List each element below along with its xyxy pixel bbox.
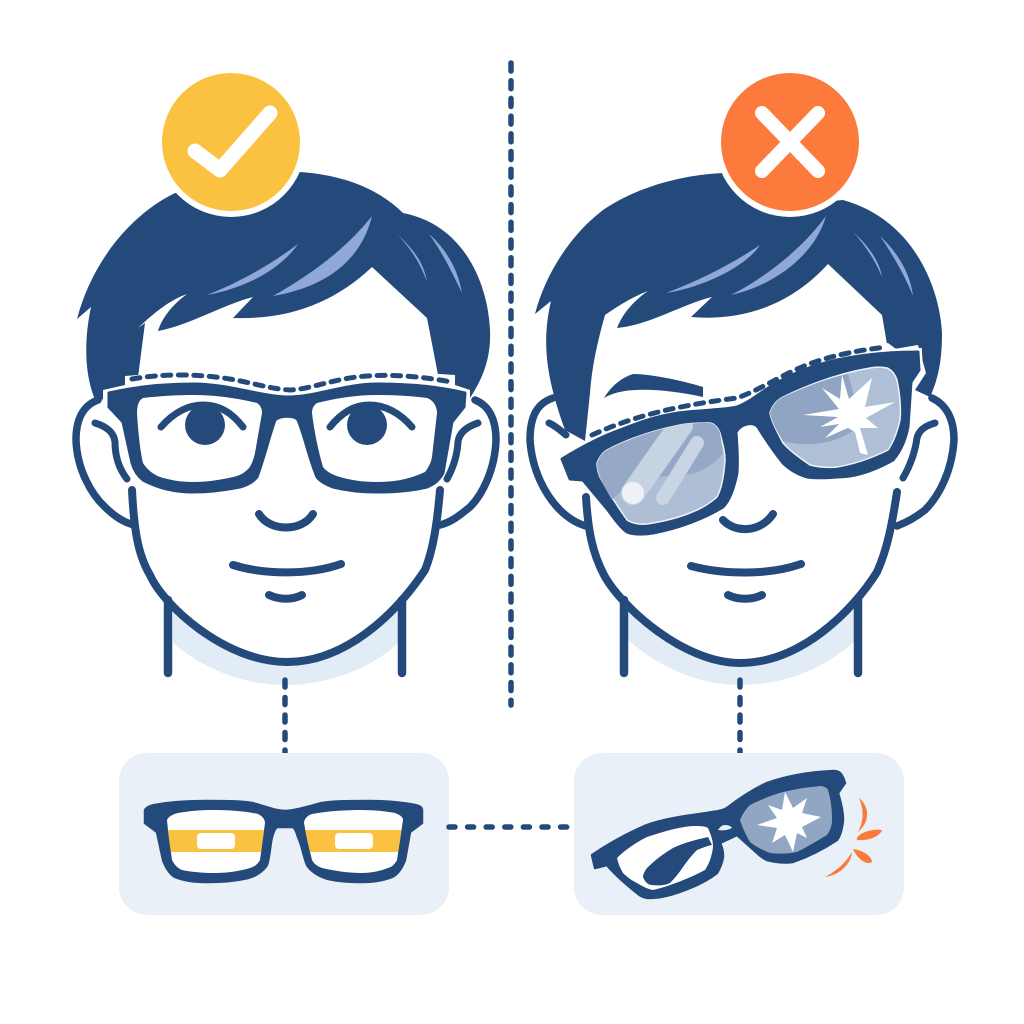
infographic <box>72 60 958 915</box>
yellow band lens glasses <box>145 801 422 882</box>
hair highlights <box>207 216 462 296</box>
hair <box>535 173 942 441</box>
dashed fit outline <box>103 371 470 406</box>
ear details <box>549 423 935 478</box>
face <box>586 492 897 663</box>
left ear <box>76 400 134 525</box>
orange impact marks <box>825 798 882 877</box>
damaged glasses <box>592 771 845 898</box>
tinted cracked lens <box>770 367 900 467</box>
connector: right figure to panel <box>737 680 743 755</box>
tinted left lens <box>597 423 725 524</box>
eyebrow <box>604 374 703 398</box>
glasses <box>109 384 465 492</box>
neck shadow <box>628 607 854 685</box>
center divider <box>508 63 514 705</box>
right ear <box>440 400 496 525</box>
eyes <box>161 405 412 445</box>
cross badge <box>715 67 865 217</box>
neck <box>624 600 858 673</box>
crooked glasses frame <box>562 352 919 534</box>
hair <box>77 172 490 402</box>
left ear <box>530 398 590 527</box>
panel: good fit figure <box>76 67 496 685</box>
neck shadow <box>173 608 398 685</box>
ear details <box>95 423 478 479</box>
nose and mouth <box>691 514 801 599</box>
hair highlights <box>666 216 913 296</box>
check badge <box>156 67 306 217</box>
connector: between panels <box>449 824 576 830</box>
connector: left figure to panel <box>282 680 288 755</box>
white halo and dashed fit outline <box>562 343 919 510</box>
panel: poor fit figure <box>530 67 954 685</box>
nose and mouth <box>233 514 341 599</box>
panel: bad glasses <box>574 753 904 915</box>
star crack <box>803 375 895 455</box>
panel: good glasses <box>119 753 449 915</box>
right ear <box>897 398 954 526</box>
lens glare streaks <box>622 425 697 504</box>
neck <box>168 600 402 673</box>
face <box>132 490 440 662</box>
lens star <box>757 792 821 852</box>
